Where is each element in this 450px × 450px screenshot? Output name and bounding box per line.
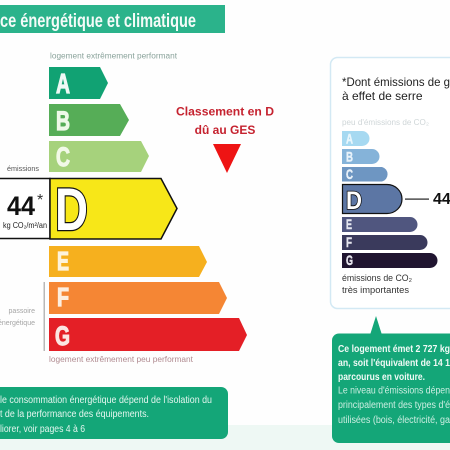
CO2 band B (342, 148, 380, 164)
CO2 band D current rating (342, 184, 402, 215)
CO2 band G (342, 252, 438, 268)
CO2 band G: G (346, 252, 353, 268)
CO2 band D current rating: D (346, 187, 362, 215)
red callout (176, 104, 274, 173)
emissions value box: 44 (7, 191, 35, 221)
energy rating scale (49, 52, 247, 364)
band D current rating: D (55, 176, 88, 243)
greenhouse note: parcourus en voiture. (338, 372, 425, 383)
consumption note (0, 387, 228, 439)
emissions value box: kg CO₂/m²/an (3, 221, 47, 230)
band B: B (56, 106, 70, 136)
greenhouse gas panel (330, 58, 450, 308)
icon: red down triangle (213, 144, 241, 173)
panel heading: à effet de serre (342, 89, 423, 103)
bottom CO2 label: émissions de CO₂ (342, 273, 412, 283)
CO2 band E: E (346, 216, 352, 232)
band E (49, 246, 207, 277)
emissions value box (0, 178, 50, 238)
band C: C (56, 142, 70, 172)
band F (49, 282, 227, 314)
bottom CO2 label (342, 273, 412, 295)
title banner: ce énergétique et climatique (0, 11, 196, 32)
consumption note: t de la performance des équipements. (0, 409, 149, 420)
CO2 band C: C (346, 166, 353, 182)
CO2 band E (342, 216, 418, 232)
band A: A (56, 68, 70, 99)
bottom CO2 label: très importantes (342, 285, 410, 295)
title banner (0, 5, 225, 33)
emissions value box: * (37, 192, 43, 209)
bottom scale label: logement extrêmement peu performant (49, 355, 194, 364)
passoire bracket and label (0, 282, 45, 351)
top scale label: logement extrêmement performant (50, 52, 178, 60)
band C (49, 141, 149, 172)
CO2 band C (342, 166, 388, 182)
CO2 band F: F (346, 234, 352, 250)
red callout: Classement en D (176, 104, 274, 118)
band F: F (57, 282, 69, 312)
panel heading (342, 75, 450, 103)
CO2 band B: B (346, 148, 353, 164)
CO2 band A: A (346, 130, 353, 146)
emissions label: émissions (7, 166, 40, 173)
band E: E (57, 246, 69, 276)
band D current rating (50, 176, 177, 243)
CO2 value with leader line (405, 191, 450, 208)
band G (49, 318, 247, 351)
band A (49, 67, 108, 99)
consumption note: liorer, voir pages 4 à 6 (0, 424, 85, 435)
red callout: dû au GES (195, 123, 255, 137)
top CO2 label: peu d'émissions de CO₂ (342, 118, 429, 127)
CO2 band A (342, 130, 370, 146)
CO2 band F (342, 234, 428, 250)
passoire bracket and label: passoire (9, 308, 35, 315)
consumption note: le consommation énergétique dépend de l'isolation du (0, 395, 212, 406)
band G: G (55, 321, 70, 351)
greenhouse note (332, 316, 450, 443)
band B (49, 104, 129, 136)
